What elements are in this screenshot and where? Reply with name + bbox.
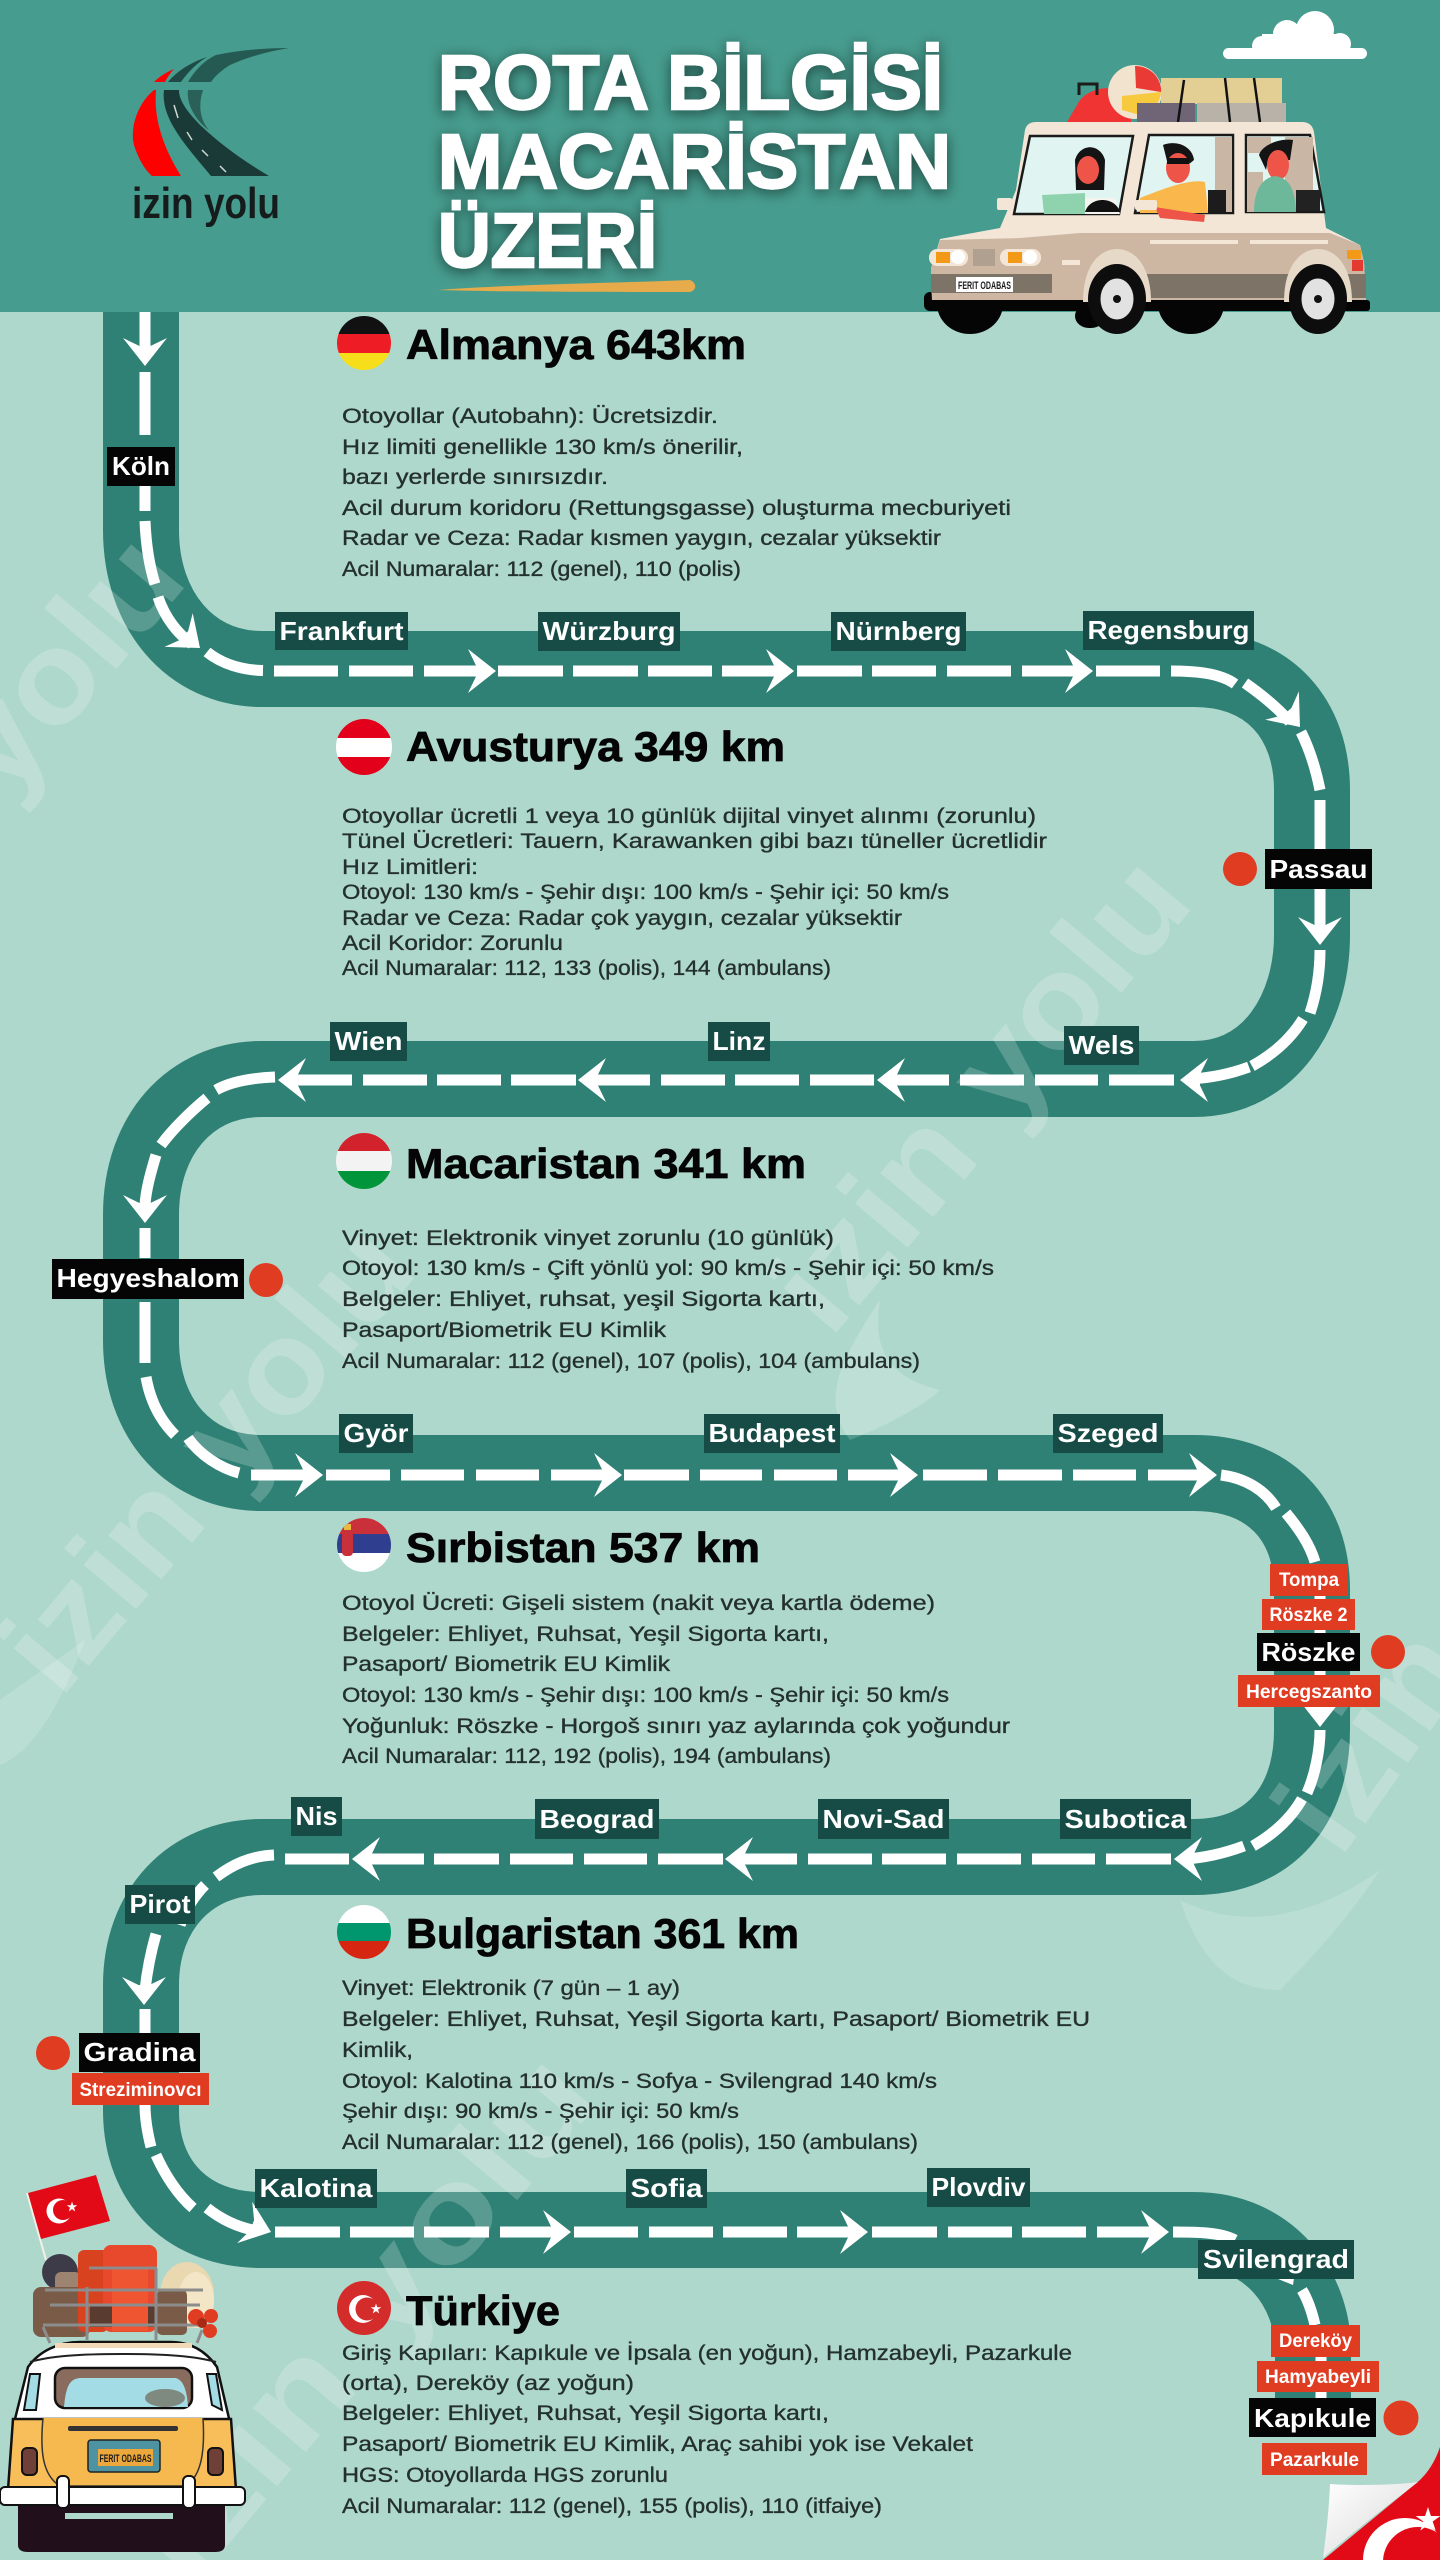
label: Hamyabeyli: Hamyabeyli	[1265, 2367, 1371, 2388]
label: Gradina	[79, 2033, 200, 2072]
label: Köln	[107, 447, 175, 486]
label: Nis	[291, 1797, 342, 1836]
label: Würzburg: Würzburg	[542, 616, 676, 646]
side windows	[24, 2374, 222, 2410]
label: Sofia	[626, 2169, 707, 2208]
label: Regensburg: Regensburg	[1088, 615, 1250, 645]
label: Röszke 2: Röszke 2	[1270, 1605, 1348, 1626]
label: Streziminovcı	[72, 2073, 209, 2105]
title: ÜZERİ	[438, 198, 657, 284]
lane dashes	[145, 312, 1321, 2398]
text block: Sırbistan rules: Yoğunluk: Röszke - Horgoš sınırı yaz aylarında çok yoğundur	[342, 1715, 1010, 1738]
label: Novi-Sad: Novi-Sad	[822, 1804, 944, 1834]
text block: Avusturya rules: Otoyollar ücretli 1 veya 10 günlük dijital vinyet alınmı (zorunlu)	[342, 805, 1036, 828]
label: Linz	[708, 1022, 770, 1061]
text block: Almanya rules: Acil durum koridoru (Rettungsgasse) oluşturma mecburiyeti	[342, 497, 1011, 520]
label: Streziminovcı: Streziminovcı	[80, 2080, 202, 2101]
page curl with Turkish flag	[1323, 2447, 1440, 2560]
text block: Türkiye rules: Pasaport/ Biometrik EU Kimlik, Araç sahibi yok ise Vekalet	[342, 2433, 973, 2456]
passengers	[1042, 140, 1320, 222]
text block: Macaristan rules	[342, 1227, 994, 1373]
label: Wels: Wels	[1068, 1030, 1134, 1060]
text block: Sırbistan rules	[342, 1592, 1010, 1768]
label: Subotica	[1060, 1799, 1191, 1839]
label: Röszke 2	[1262, 1599, 1355, 1630]
label: Gradina: Gradina	[84, 2037, 196, 2067]
roof luggage	[33, 2245, 218, 2343]
label: Pazarkule	[1262, 2443, 1367, 2475]
number plate: FERIT ODABAS	[100, 2453, 152, 2465]
heading: Bulgaristan: Bulgaristan 361 km	[406, 1910, 799, 1957]
label: Beograd: Beograd	[540, 1804, 654, 1834]
text block: Avusturya rules: Hız Limitleri:	[342, 856, 478, 879]
text block: Almanya rules: Hız limiti genellikle 130 km/s önerilir,	[342, 436, 743, 459]
label: Frankfurt	[275, 612, 408, 650]
label: Tompa: Tompa	[1279, 1570, 1339, 1591]
bumper	[0, 2476, 245, 2508]
label: Tompa	[1270, 1564, 1348, 1596]
label: Nis: Nis	[296, 1801, 338, 1831]
text block: Bulgaristan rules: Kimlik,	[342, 2039, 413, 2062]
roof rack	[43, 2268, 203, 2343]
text block: Almanya rules	[342, 405, 1011, 581]
rear trim bar	[68, 2426, 178, 2431]
label: Passau: Passau	[1270, 854, 1368, 884]
title	[438, 40, 951, 284]
logo road mark	[133, 48, 289, 176]
number plate: FERIT ODABAS	[958, 280, 1011, 292]
label: Sofia: Sofia	[630, 2173, 703, 2203]
headlights and grille	[929, 249, 1363, 271]
van roof and upper body	[13, 2342, 231, 2427]
heading: Macaristan: Macaristan 341 km	[406, 1140, 806, 1187]
text block: Avusturya rules	[342, 805, 1047, 980]
decorative bow	[188, 2309, 218, 2338]
label: Wien	[330, 1022, 407, 1061]
label: Pirot: Pirot	[130, 1889, 191, 1919]
text block: Sırbistan rules: Otoyol: 130 km/s - Şehir dışı: 100 km/s - Şehir içi: 50 km/s	[342, 1684, 949, 1707]
woman with map	[1042, 147, 1120, 214]
van lower body	[8, 2419, 236, 2490]
text block: Sırbistan rules: Acil Numaralar: 112, 192 (polis), 194 (ambulans)	[342, 1745, 831, 1768]
windows	[1014, 135, 1324, 214]
border dot: Gradina	[36, 2036, 70, 2070]
panel: Almanya	[335, 315, 1011, 581]
label: Szeged: Szeged	[1058, 1418, 1158, 1448]
label: Subotica: Subotica	[1064, 1804, 1187, 1834]
icon: Bulgarian flag	[337, 1905, 391, 1959]
label: Györ: Györ	[344, 1418, 408, 1448]
heading: Avusturya: Avusturya 349 km	[406, 723, 785, 770]
text block: Türkiye rules	[342, 2342, 1072, 2518]
label: Regensburg	[1083, 611, 1254, 650]
rear passenger	[1254, 140, 1320, 212]
icon: cloud	[1223, 11, 1367, 59]
label: Kalotina: Kalotina	[260, 2173, 373, 2203]
label: Györ	[339, 1414, 413, 1453]
illustration: yellow van with flag	[0, 2175, 245, 2552]
text block: Bulgaristan rules: Şehir dışı: 90 km/s - Şehir içi: 50 km/s	[342, 2100, 739, 2123]
text block: Bulgaristan rules: Vinyet: Elektronik (7 gün – 1 ay)	[342, 1977, 680, 2000]
border dot: Hegyeshalom	[249, 1263, 283, 1297]
route road with lane markings	[122, 300, 1342, 2420]
header band	[0, 0, 1440, 312]
label: Hegyeshalom: Hegyeshalom	[56, 1263, 240, 1293]
label: Hercegszanto: Hercegszanto	[1246, 1682, 1372, 1703]
label: Würzburg	[538, 612, 680, 651]
panel: Bulgaristan	[335, 1905, 1090, 2154]
label: Kapıkule	[1249, 2398, 1376, 2437]
panel: Macaristan	[335, 1133, 994, 1373]
border dot: Passau	[1223, 852, 1257, 886]
border dot: Röszke	[1371, 1635, 1405, 1669]
icon: German flag	[337, 316, 391, 370]
text block: Türkiye rules: (orta), Dereköy (az yoğun)	[342, 2372, 634, 2395]
label: Szeged	[1053, 1414, 1163, 1453]
label: Pirot	[125, 1885, 195, 1924]
rear window	[55, 2368, 192, 2408]
heading: Türkiye: Türkiye	[406, 2287, 560, 2334]
watermarks: izin yolu	[740, 828, 1218, 1358]
icon: Hungarian flag	[335, 1133, 395, 1190]
label: Röszke	[1257, 1633, 1360, 1671]
label: Plovdiv	[927, 2168, 1030, 2207]
road band	[141, 300, 1313, 2420]
label: Novi-Sad	[818, 1799, 949, 1839]
label: Beograd	[535, 1799, 659, 1839]
label: Plovdiv: Plovdiv	[932, 2172, 1026, 2202]
wheel arches and wheels	[1083, 249, 1352, 334]
black undercarriage	[924, 274, 1370, 334]
icon: Austrian flag	[336, 719, 392, 775]
text block: Sırbistan rules: Belgeler: Ehliyet, Ruhsat, Yeşil Sigorta kartı,	[342, 1623, 829, 1646]
number plate	[956, 277, 1013, 292]
taillights	[22, 2448, 223, 2475]
text block: Türkiye rules: HGS: Otoyollarda HGS zorunlu	[342, 2464, 668, 2487]
roof luggage	[1067, 65, 1286, 122]
panel: Türkiye	[337, 2281, 1072, 2518]
text block: Avusturya rules: Radar ve Ceza: Radar çok yaygın, cezalar yüksektir	[342, 907, 902, 930]
door handles and trim	[997, 198, 1328, 244]
label: Wien: Wien	[334, 1026, 402, 1056]
text block: Avusturya rules: Tünel Ücretleri: Tauern, Karawanken gibi bazı tüneller ücretlidir	[342, 830, 1047, 853]
panel: Sırbistan	[335, 1518, 1010, 1768]
label: Svilengrad	[1198, 2240, 1354, 2279]
text block: Türkiye rules: Giriş Kapıları: Kapıkule ve İpsala (en yoğun), Hamzabeyli, Pazarkule	[342, 2342, 1072, 2365]
flag on pole	[27, 2175, 110, 2260]
text block: Macaristan rules: Otoyol: 130 km/s - Çift yönlü yol: 90 km/s - Şehir içi: 50 km/s	[342, 1257, 994, 1280]
label: Nürnberg	[831, 612, 966, 651]
label: Kalotina	[255, 2169, 377, 2208]
text block: Almanya rules: Acil Numaralar: 112 (genel), 110 (polis)	[342, 558, 741, 581]
text block: Macaristan rules: Vinyet: Elektronik vinyet zorunlu (10 günlük)	[342, 1227, 834, 1250]
panel: Avusturya	[335, 718, 1047, 980]
illustration: family car	[924, 65, 1370, 334]
text block: Macaristan rules: Acil Numaralar: 112 (genel), 107 (polis), 104 (ambulans)	[342, 1350, 920, 1373]
text block: Bulgaristan rules: Otoyol: Kalotina 110 km/s - Sofya - Svilengrad 140 km/s	[342, 2070, 937, 2093]
text block: Macaristan rules: Pasaport/Biometrik EU Kimlik	[342, 1319, 667, 1342]
logo wordmark: izin yolu	[132, 179, 280, 228]
text block: Bulgaristan rules	[342, 1977, 1090, 2154]
border dot: Kapıkule	[1384, 2400, 1418, 2436]
text block: Türkiye rules: Belgeler: Ehliyet, Ruhsat, Yeşil Sigorta kartı,	[342, 2402, 829, 2425]
car body	[931, 122, 1366, 300]
icon: Turkish flag	[337, 2281, 391, 2335]
label: Pazarkule: Pazarkule	[1270, 2450, 1359, 2471]
title underline brush	[438, 280, 695, 292]
number plate	[88, 2440, 160, 2472]
icon: Serbian flag	[335, 1518, 395, 1572]
text block: Avusturya rules: Acil Koridor: Zorunlu	[342, 932, 563, 955]
text block: Avusturya rules: Otoyol: 130 km/s - Şehir dışı: 100 km/s - Şehir içi: 50 km/s	[342, 881, 949, 904]
label: Linz: Linz	[712, 1026, 766, 1056]
city labels	[36, 447, 1418, 2475]
text block: Bulgaristan rules: Belgeler: Ehliyet, Ruhsat, Yeşil Sigorta kartı, Pasaport/ Biometrik EU	[342, 2008, 1090, 2031]
text block: Bulgaristan rules: Acil Numaralar: 112 (genel), 166 (polis), 150 (ambulans)	[342, 2131, 918, 2154]
label: Dereköy: Dereköy	[1279, 2331, 1352, 2352]
label: Hegyeshalom	[52, 1259, 244, 1299]
interior seats	[1215, 137, 1313, 212]
text block: Macaristan rules: Belgeler: Ehliyet, ruhsat, yeşil Sigorta kartı,	[342, 1288, 825, 1311]
text block: Avusturya rules: Acil Numaralar: 112, 133 (polis), 144 (ambulans)	[342, 957, 831, 980]
text block: Sırbistan rules: Otoyol Ücreti: Gişeli sistem (nakit veya kartla ödeme)	[342, 1592, 935, 1615]
label: Wels	[1064, 1026, 1139, 1065]
text block: Almanya rules: bazı yerlerde sınırsızdır.	[342, 466, 608, 489]
label: Kapıkule: Kapıkule	[1254, 2403, 1371, 2433]
title: MACARİSTAN	[438, 119, 951, 205]
label: Hamyabeyli	[1257, 2361, 1379, 2392]
label: Röszke: Röszke	[1262, 1637, 1356, 1667]
label: Nürnberg: Nürnberg	[836, 616, 962, 646]
heading: Almanya: Almanya 643km	[406, 321, 746, 368]
text block: Almanya rules: Otoyollar (Autobahn): Ücretsizdir.	[342, 405, 718, 428]
driver in yellow shirt	[1140, 143, 1226, 222]
label: Hercegszanto	[1238, 1675, 1380, 1707]
chassis	[18, 2505, 225, 2552]
label: Passau	[1265, 849, 1372, 889]
heading: Sırbistan: Sırbistan 537 km	[406, 1524, 760, 1571]
label: Budapest	[704, 1414, 840, 1453]
logo	[132, 48, 289, 228]
text block: Sırbistan rules: Pasaport/ Biometrik EU Kimlik	[342, 1653, 671, 1676]
text block: Almanya rules: Radar ve Ceza: Radar kısmen yaygın, cezalar yüksektir	[342, 527, 941, 550]
text block: Türkiye rules: Acil Numaralar: 112 (genel), 155 (polis), 110 (itfaiye)	[342, 2495, 882, 2518]
label: Budapest: Budapest	[708, 1418, 836, 1448]
label: Köln: Köln	[112, 451, 170, 481]
label: Frankfurt: Frankfurt	[280, 616, 404, 646]
direction arrowheads	[122, 338, 1342, 2296]
title: ROTA BİLGİSİ	[438, 40, 943, 126]
label: Svilengrad: Svilengrad	[1203, 2244, 1349, 2274]
label: Dereköy	[1271, 2325, 1360, 2357]
